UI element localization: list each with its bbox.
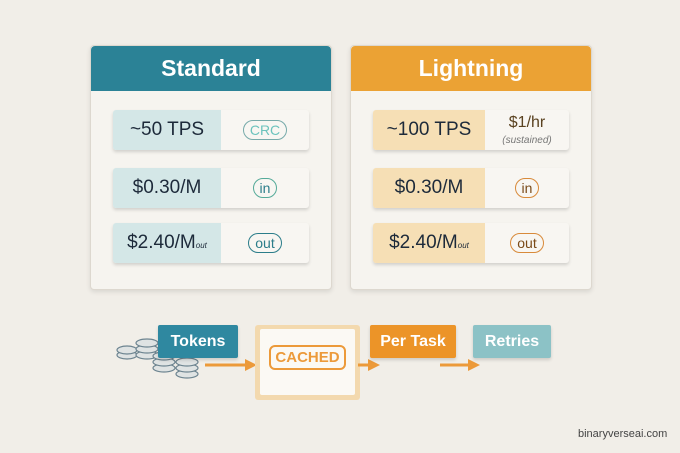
step: retries xyxy=(473,325,551,358)
row: tps xyxy=(113,110,309,150)
row: input price: in xyxy=(260,180,270,196)
row: tps: ~100 TPS xyxy=(387,119,471,140)
row: output price xyxy=(113,223,309,263)
heading: standard: Standard xyxy=(161,55,261,81)
step: per task xyxy=(370,325,456,358)
row: output price: out xyxy=(517,235,537,251)
heading: standard xyxy=(91,46,331,91)
icon: coin stacks xyxy=(116,338,199,379)
row: input price: $0.30/M xyxy=(395,177,463,198)
step: cached xyxy=(255,325,360,400)
arrow 1 xyxy=(205,359,255,371)
arrow 2 xyxy=(358,359,380,371)
row: input price: in xyxy=(522,180,532,196)
panel: lightning xyxy=(350,45,592,290)
step: per task: Per Task xyxy=(380,333,446,350)
row: output price: $2.40/Mout xyxy=(127,232,207,253)
row: output price: $2.40/Mout xyxy=(389,232,469,253)
watermark: binaryverseai.com xyxy=(578,428,667,440)
row: tps: ~50 TPS xyxy=(130,119,204,140)
row: input price xyxy=(113,168,309,208)
row: input price: $0.30/M xyxy=(133,177,201,198)
row: tps xyxy=(373,110,569,150)
step: tokens xyxy=(158,325,238,358)
step: retries: Retries xyxy=(485,333,539,350)
row: output price: out xyxy=(255,235,275,251)
step: tokens: Tokens xyxy=(171,333,225,350)
step: cached: CACHED xyxy=(275,349,340,366)
heading: lightning: Lightning xyxy=(419,55,523,81)
row: tps: CRC xyxy=(250,122,280,138)
heading: lightning xyxy=(351,46,591,91)
row: tps: $1/hr xyxy=(509,114,545,131)
row: tps: (sustained) xyxy=(502,135,552,146)
row: output price xyxy=(373,223,569,263)
panel: standard xyxy=(90,45,332,290)
row: input price xyxy=(373,168,569,208)
arrow 3 xyxy=(440,359,480,371)
